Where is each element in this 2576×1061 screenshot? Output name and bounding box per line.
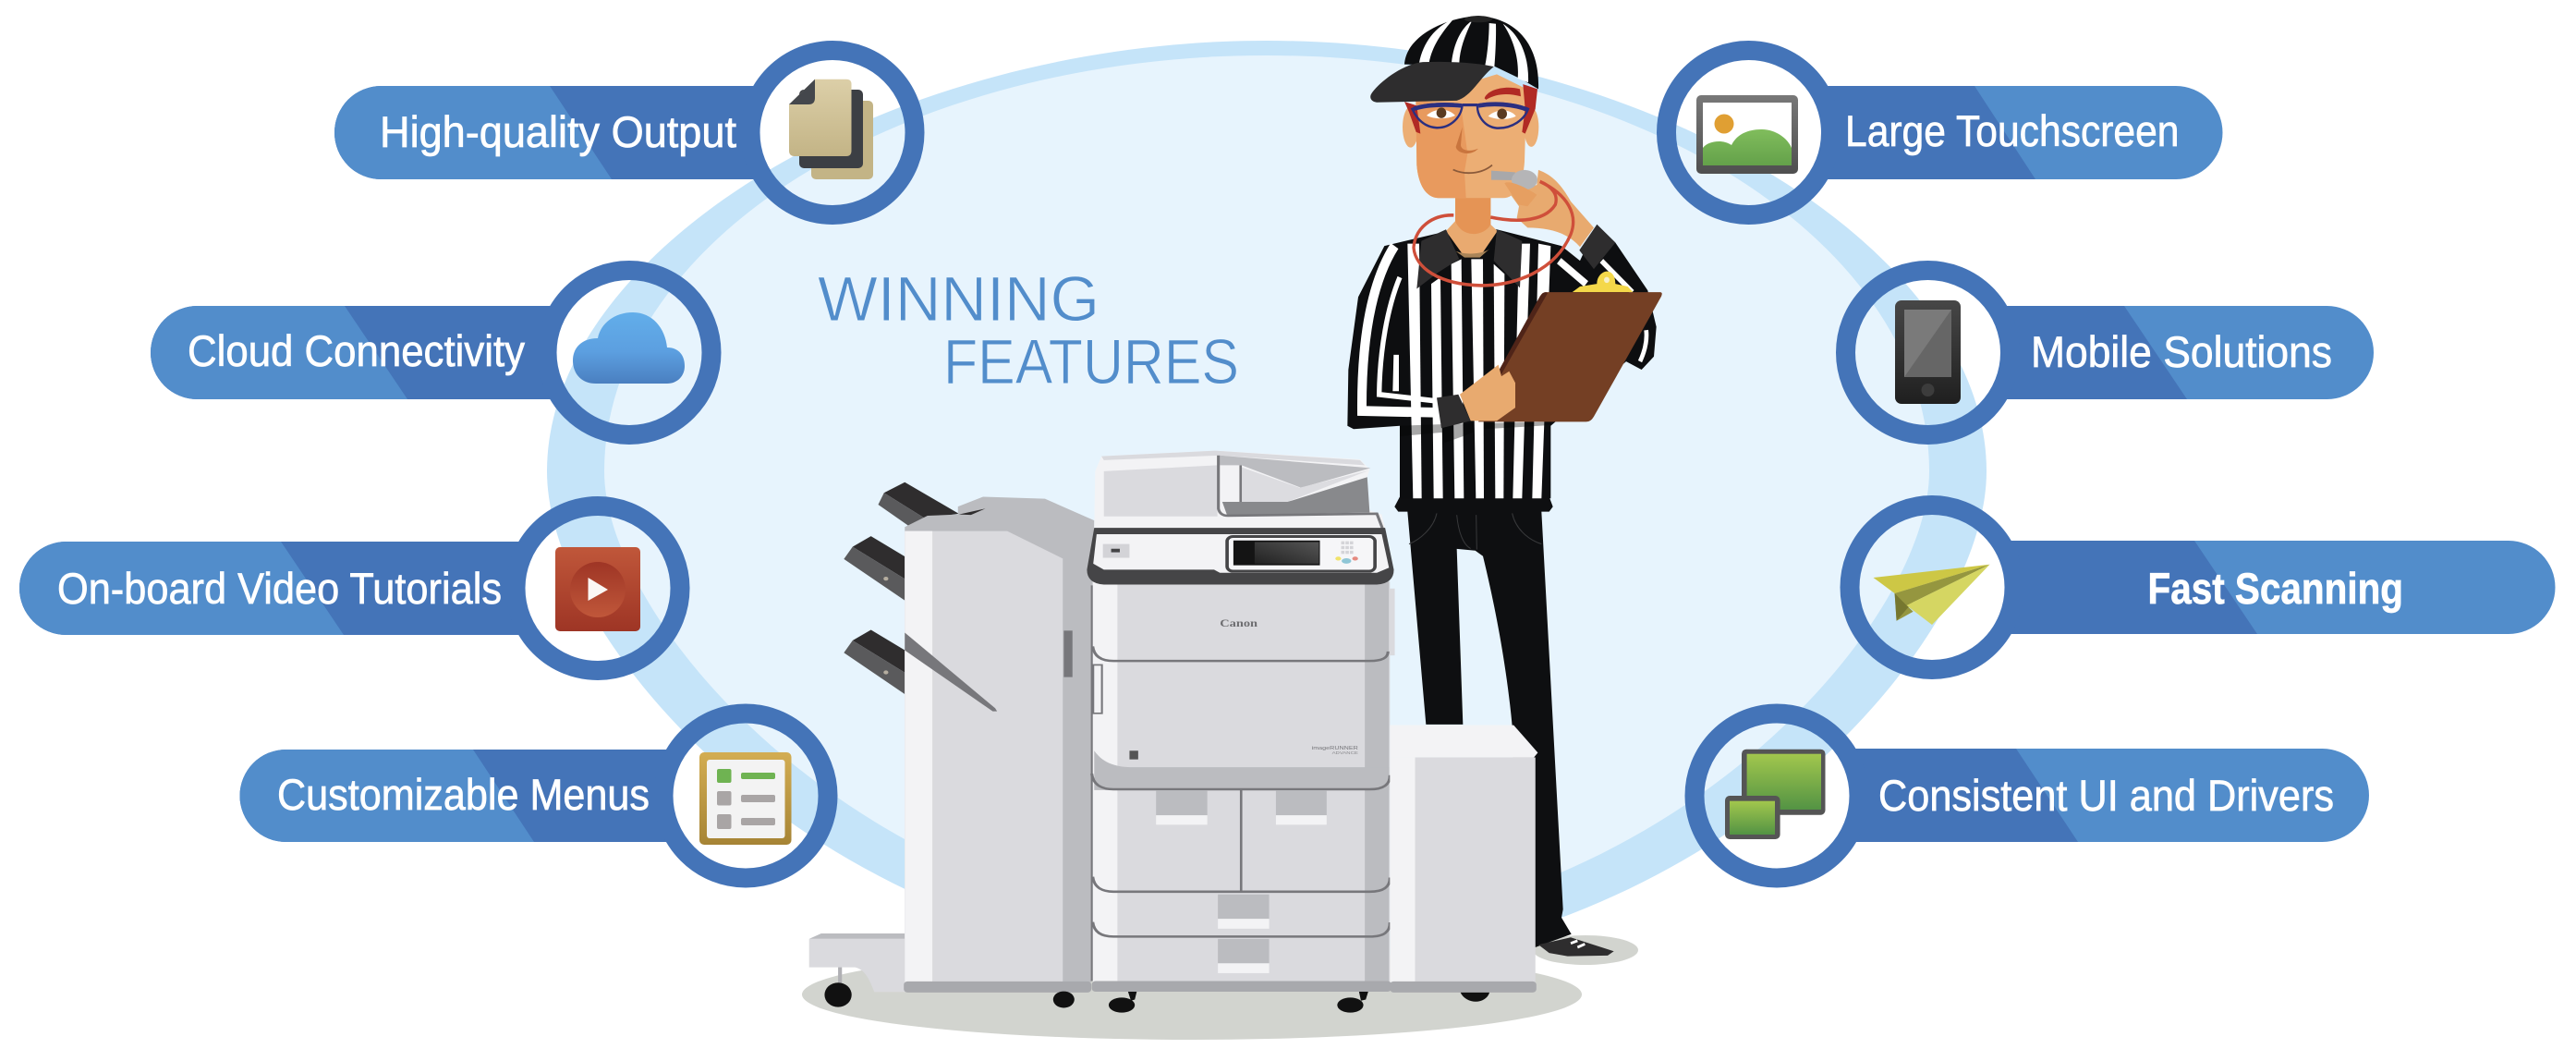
feature: Customizable Menus	[240, 713, 828, 878]
background ellipse interior	[604, 55, 1929, 933]
ADVANCE label: ADVANCE	[1332, 751, 1358, 756]
left hand	[1460, 365, 1515, 421]
feature: Consistent UI and Drivers	[1695, 713, 2369, 878]
finisher unit	[904, 497, 1094, 1007]
referee legs and shoe	[1394, 496, 1614, 957]
control panel	[1087, 528, 1394, 585]
lanyard	[1414, 181, 1574, 286]
feature: High-quality Output	[334, 50, 915, 214]
title: Winning Features: FEATURES	[943, 326, 1239, 397]
collar	[1416, 229, 1522, 288]
shirt shadow	[1400, 421, 1550, 443]
feature: Large Touchscreen	[1667, 50, 2223, 214]
feature: Mobile Solutions	[1846, 270, 2374, 434]
floor shadow	[802, 949, 1582, 1040]
clipboard clip	[1573, 272, 1633, 292]
shoe shadow	[1533, 935, 1638, 965]
stapler extension base	[809, 933, 905, 1007]
face	[1416, 74, 1526, 198]
document feeder	[1094, 451, 1385, 530]
shirt stripes	[1392, 244, 1550, 498]
nose and mouth	[1456, 127, 1478, 153]
side paper deck	[1390, 726, 1537, 1002]
ears	[1403, 106, 1418, 148]
Canon logo: Canon	[1220, 617, 1258, 629]
title: Winning Features: WINNING	[818, 263, 1100, 335]
printer main body	[1092, 581, 1395, 1013]
right cuff	[1579, 225, 1615, 269]
feature: Cloud Connectivity	[151, 270, 711, 434]
referee character	[1347, 16, 1662, 957]
feature: Mobile Solutions: Mobile Solutions	[2031, 327, 2332, 376]
shirt	[1347, 225, 1657, 498]
output trays	[844, 482, 959, 695]
feature: On-board Video Tutorials: On-board Video Tutorials	[57, 564, 502, 613]
feature: Fast Scanning	[1850, 505, 2556, 669]
feature: Fast Scanning: Fast Scanning	[2147, 564, 2403, 613]
left cuff	[1437, 395, 1471, 428]
glasses	[1412, 104, 1528, 128]
feature: Large Touchscreen: Large Touchscreen	[1845, 106, 2179, 155]
background ellipse ring	[547, 41, 1987, 970]
referee upper body	[1347, 16, 1662, 498]
multifunction printer	[809, 451, 1537, 1013]
title: Winning Features	[818, 263, 1239, 397]
imageRUNNER label: imageRUNNER	[1312, 746, 1358, 751]
eyes	[1427, 110, 1516, 119]
feature: Customizable Menus: Customizable Menus	[277, 770, 650, 819]
feature: On-board Video Tutorials	[19, 506, 680, 671]
whistle and hand	[1511, 170, 1594, 247]
feature: Cloud Connectivity: Cloud Connectivity	[188, 326, 525, 375]
neck	[1446, 195, 1498, 257]
cap	[1404, 16, 1538, 89]
clipboard	[1478, 292, 1662, 421]
hair and eyebrow	[1404, 84, 1537, 134]
feature: Consistent UI and Drivers: Consistent UI and Drivers	[1878, 771, 2334, 820]
feature: High-quality Output: High-quality Output	[380, 107, 736, 156]
